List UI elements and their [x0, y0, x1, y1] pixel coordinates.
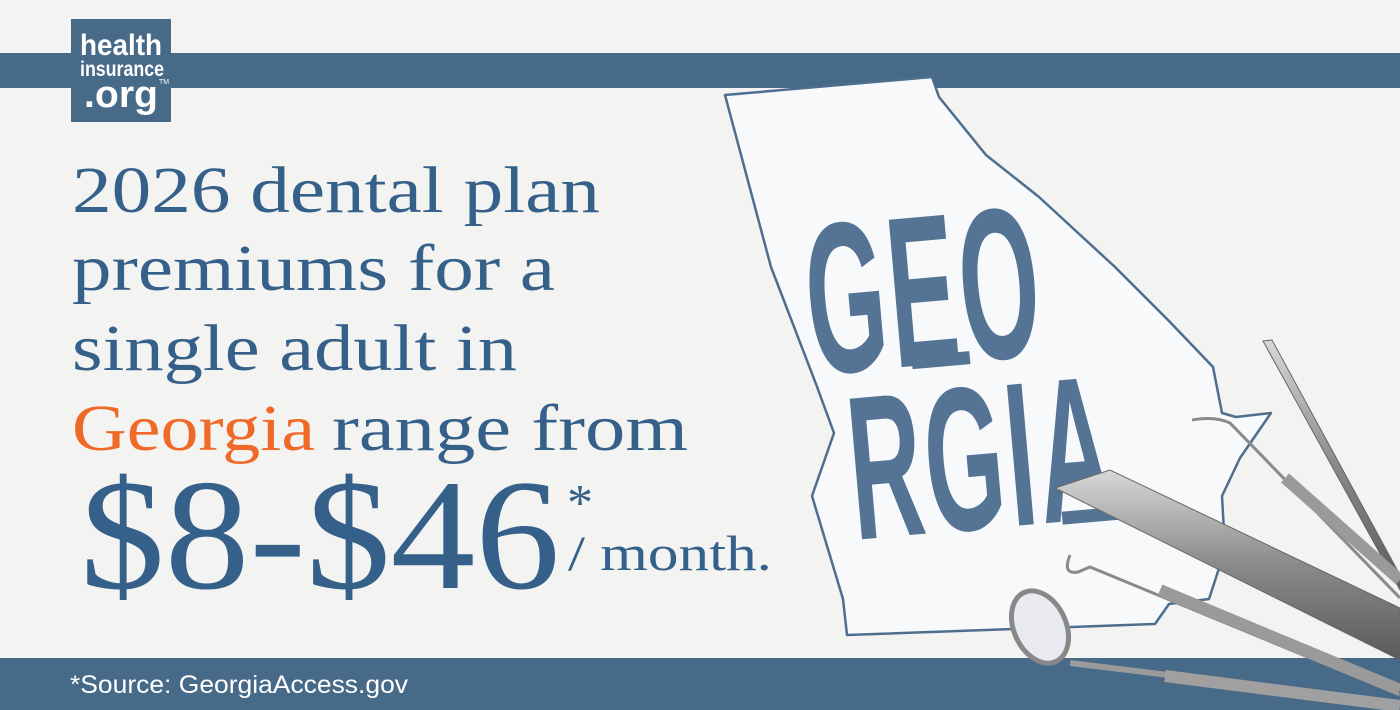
headline: 2026 dental plan	[72, 154, 600, 227]
headline	[72, 154, 688, 465]
spatula	[1263, 340, 1400, 590]
price	[80, 448, 772, 623]
georgia map	[725, 77, 1271, 635]
source: *Source: GeorgiaAccess.gov	[70, 671, 409, 699]
price: $8-$46	[80, 448, 560, 623]
top band	[0, 53, 1400, 88]
headline: single adult in	[72, 312, 517, 385]
tweezers	[1055, 470, 1400, 660]
explorer	[1067, 555, 1400, 695]
logo: health	[80, 29, 162, 62]
logo: insurance	[80, 58, 164, 81]
headline: premiums for a	[72, 232, 555, 305]
bottom band	[0, 658, 1400, 710]
map letters: RGIA	[839, 332, 1123, 584]
logo	[71, 19, 171, 122]
logo: TM	[159, 79, 169, 86]
price: *	[567, 475, 593, 532]
scaler	[1192, 419, 1400, 598]
map letters	[796, 155, 1128, 586]
headline: Georgia	[72, 392, 315, 465]
mirror	[1000, 582, 1080, 672]
dental tools	[1000, 340, 1400, 706]
headline: range from	[332, 392, 688, 465]
logo: .org	[84, 74, 158, 116]
map letters: GEO	[796, 160, 1052, 421]
price: / month.	[568, 525, 772, 581]
